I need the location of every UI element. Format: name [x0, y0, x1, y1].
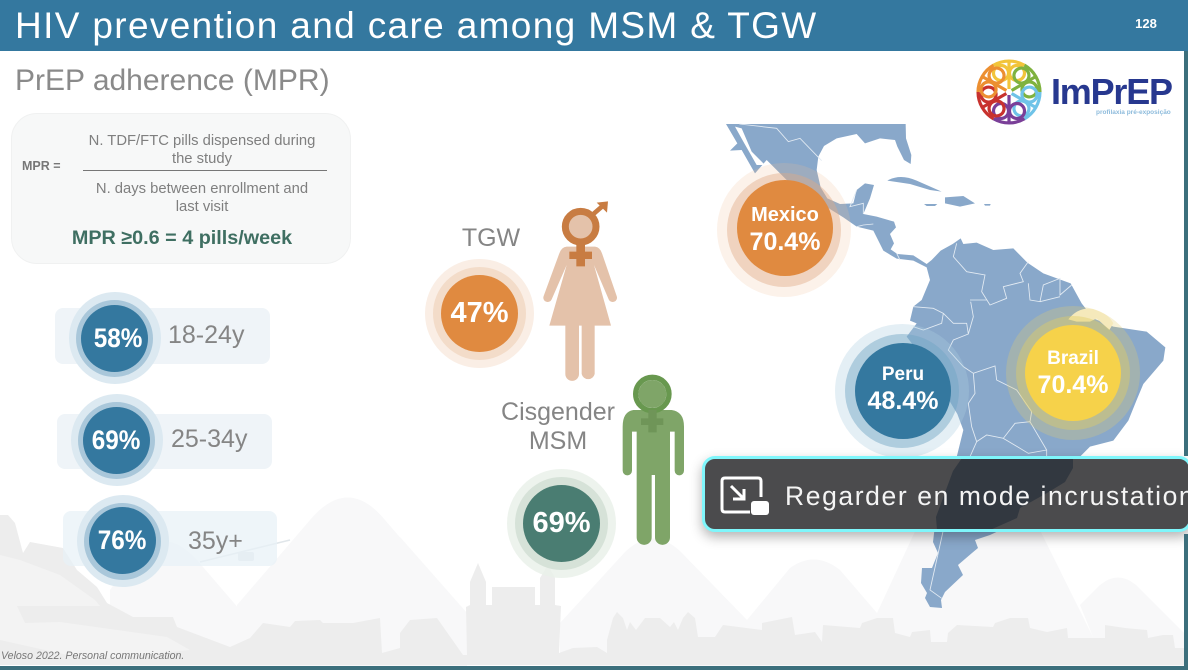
MPR label: MPR = [22, 159, 61, 173]
value: 70.4% [1038, 371, 1108, 399]
Cisgender MSM label: MSM [529, 427, 587, 455]
ring [77, 495, 169, 587]
bottom edge [0, 666, 1188, 670]
value [83, 407, 150, 474]
value [523, 485, 600, 562]
subtitle: PrEP adherence (MPR) [15, 64, 330, 97]
icon: MSM figure [622, 374, 684, 545]
value [81, 305, 148, 372]
ring [433, 267, 526, 360]
Argentina seen through tooltip [936, 459, 1073, 529]
logo tagline: profilaxia pré-exposição [1096, 109, 1171, 116]
value [1025, 325, 1121, 421]
panel: MPR formula [11, 113, 351, 264]
TGW value [425, 259, 534, 368]
value [855, 343, 951, 439]
logo wordmark: ImPrEP [1051, 71, 1172, 112]
row band [57, 414, 272, 469]
ring [69, 292, 161, 384]
icon: ImPrEP logo mark [976, 60, 1042, 124]
age row 18-24y [55, 292, 270, 384]
numerator [89, 133, 315, 167]
value: Brazil [1047, 348, 1099, 369]
ring [71, 394, 163, 486]
threshold: MPR ≥0.6 = 4 pills/week [72, 227, 292, 249]
Cisgender MSM label [501, 398, 615, 455]
title: HIV prevention and care among MSM & TGW [15, 5, 818, 46]
ring [515, 477, 608, 570]
age label: 25-34y [171, 425, 247, 453]
callout: Brazil [1006, 306, 1140, 440]
value [89, 507, 156, 574]
fraction line [83, 170, 327, 171]
icon: picture in picture [720, 476, 769, 515]
TGW label: TGW [462, 224, 520, 252]
tooltip: picture in picture [702, 456, 1188, 532]
source note: Veloso 2022. Personal communication. [1, 650, 184, 662]
MSM value [507, 469, 616, 578]
tooltip text: Regarder en mode incrustation [785, 481, 1188, 511]
denominator [96, 181, 308, 215]
row band [55, 308, 270, 364]
ring [1016, 316, 1130, 430]
value: 70.4% [750, 228, 820, 256]
icon: TGW figure [543, 201, 617, 381]
age row 25-34y [57, 394, 272, 486]
value: 47% [450, 297, 509, 329]
denominator: last visit [176, 199, 228, 215]
value [441, 275, 518, 352]
right edge [1184, 51, 1188, 456]
slide number: 128 [1135, 16, 1157, 31]
value: 76% [98, 525, 147, 555]
value: Mexico [751, 204, 819, 226]
callout: Mexico [717, 163, 851, 297]
ring [845, 334, 959, 448]
value: 69% [532, 507, 591, 539]
numerator: N. TDF/FTC pills dispensed during [89, 133, 315, 149]
right edge lower [1184, 534, 1188, 670]
age label: 35y+ [188, 527, 243, 555]
value: 69% [92, 425, 141, 455]
value: 48.4% [868, 387, 938, 415]
header bar [0, 0, 1188, 51]
age label: 18-24y [168, 321, 244, 349]
ring [727, 173, 841, 287]
numerator: the study [172, 151, 232, 167]
age row 35y+ [63, 495, 277, 587]
callout: Peru [835, 324, 969, 458]
denominator: N. days between enrollment and [96, 181, 308, 197]
value: 58% [94, 323, 143, 353]
Cisgender MSM label: Cisgender [501, 398, 615, 426]
row band [63, 511, 277, 566]
value [737, 180, 833, 276]
value: Peru [882, 364, 924, 385]
